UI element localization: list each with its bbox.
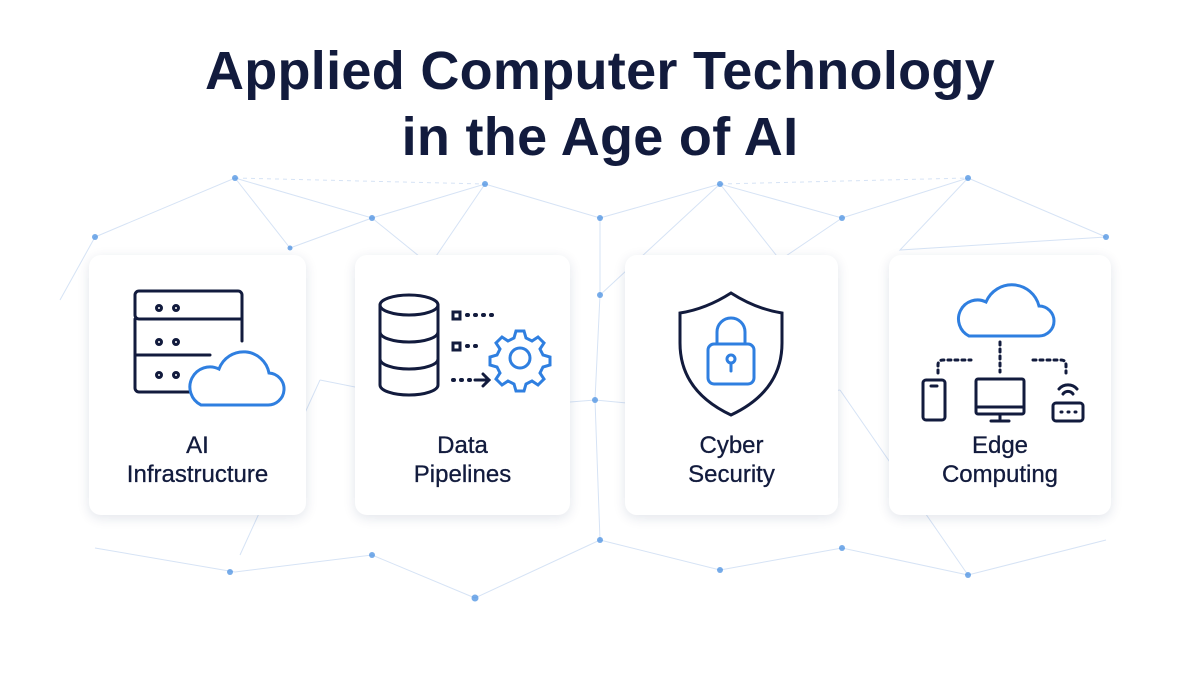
icon: database and gear	[378, 294, 552, 396]
label	[127, 432, 268, 488]
label: Edge	[972, 432, 1028, 459]
label: Data	[437, 432, 488, 459]
label	[942, 432, 1058, 488]
panel: data pipelines	[355, 255, 570, 515]
title: in the Age of AI	[402, 107, 798, 167]
title	[205, 41, 995, 167]
label: Cyber	[699, 432, 764, 459]
panel: AI infrastructure	[89, 255, 306, 515]
title: Applied Computer Technology	[205, 41, 995, 101]
label: Pipelines	[414, 461, 511, 488]
label: Security	[688, 461, 775, 488]
label: Computing	[942, 461, 1058, 488]
panel: cyber security	[625, 255, 838, 515]
icon: server with cloud	[134, 290, 286, 406]
icon: shield with lock	[678, 291, 784, 417]
icon: cloud with devices	[922, 283, 1084, 422]
label: AI	[186, 432, 209, 459]
label: Infrastructure	[127, 461, 268, 488]
label	[688, 432, 775, 488]
panel: edge computing	[889, 255, 1111, 515]
label	[414, 432, 511, 488]
